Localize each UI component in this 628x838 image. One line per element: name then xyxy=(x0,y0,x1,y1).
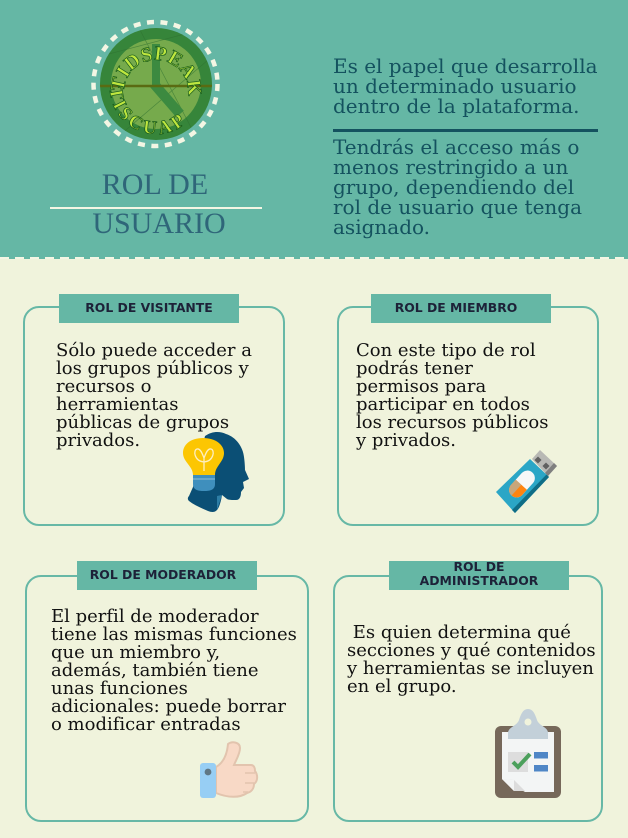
body text: Sólo puede acceder a xyxy=(56,340,252,361)
access text: asignado. xyxy=(333,215,430,239)
heading xyxy=(77,561,257,590)
body text: herramientas xyxy=(56,394,178,415)
body text: y privados. xyxy=(356,430,456,451)
access text: menos restringido a un xyxy=(333,155,568,179)
body text: secciones y qué contenidos xyxy=(347,640,596,661)
body text: Con este tipo de rol xyxy=(356,340,536,361)
card frame xyxy=(337,306,599,526)
body text: permisos para xyxy=(356,376,486,397)
access text xyxy=(333,135,582,239)
panel: miembro xyxy=(337,294,599,526)
card frame xyxy=(333,575,603,822)
body text: recursos o xyxy=(56,376,151,397)
body text: El perfil de moderador xyxy=(51,606,259,627)
body text xyxy=(346,622,596,697)
body text: Es quien determina qué xyxy=(353,622,571,643)
access text: Tendrás el acceso más o xyxy=(333,135,579,159)
intro text: Es el papel que desarrolla xyxy=(333,54,598,78)
body text: y herramientas se incluyen xyxy=(347,658,594,679)
emblem: TISCUAP xyxy=(110,86,182,135)
body text: además, también tiene xyxy=(51,660,259,681)
heading: ADMINISTRADOR xyxy=(420,573,538,588)
body text: que un miembro y, xyxy=(51,642,220,663)
body text: adicionales: puede borrar xyxy=(51,696,286,717)
access text: grupo, dependiendo del xyxy=(333,175,574,199)
intro text: un determinado usuario xyxy=(333,74,577,98)
title: usuario: USUARIO xyxy=(92,207,226,240)
divider xyxy=(333,129,598,132)
body text xyxy=(51,606,297,735)
body text xyxy=(356,340,548,451)
body text: en el grupo. xyxy=(347,676,457,697)
heading: ROL DE MODERADOR xyxy=(90,566,236,582)
body text: tiene las mismas funciones xyxy=(51,624,297,645)
panel: moderador xyxy=(25,561,309,822)
icon: clipboard xyxy=(495,709,561,798)
heading: ROL DE xyxy=(453,559,505,574)
body text: los grupos públicos y xyxy=(56,358,249,379)
emblem: TIDSPEAK xyxy=(110,46,202,96)
heading: ROL DE VISITANTE xyxy=(85,300,213,314)
card frame xyxy=(23,306,285,526)
body text: podrás tener xyxy=(356,358,473,379)
panel: administrador xyxy=(333,559,603,822)
header band xyxy=(0,0,628,258)
intro text xyxy=(333,54,598,118)
panel: visitante xyxy=(23,294,285,526)
body text: o modificar entradas xyxy=(51,714,241,735)
dashed edge xyxy=(0,257,628,259)
emblem xyxy=(91,20,220,148)
icon: head with lightbulb xyxy=(183,432,249,512)
heading xyxy=(389,561,569,590)
access text: rol de usuario que tenga xyxy=(333,195,582,219)
title rule xyxy=(50,207,262,209)
intro text: dentro de la plataforma. xyxy=(333,94,580,118)
icon: thumbs up xyxy=(200,741,258,798)
heading xyxy=(59,294,239,323)
body text: los recursos públicos xyxy=(356,412,548,433)
body text: públicas de grupos xyxy=(56,412,229,433)
heading xyxy=(371,294,551,323)
body text: privados. xyxy=(56,430,140,451)
body text: unas funciones xyxy=(51,678,188,699)
icon: usb pill xyxy=(496,450,557,513)
title: rol de: ROL DE xyxy=(102,168,208,201)
heading: ROL DE MIEMBRO xyxy=(395,300,517,314)
card frame xyxy=(25,575,309,822)
body text xyxy=(56,340,252,451)
body text: participar en todos xyxy=(356,394,530,415)
